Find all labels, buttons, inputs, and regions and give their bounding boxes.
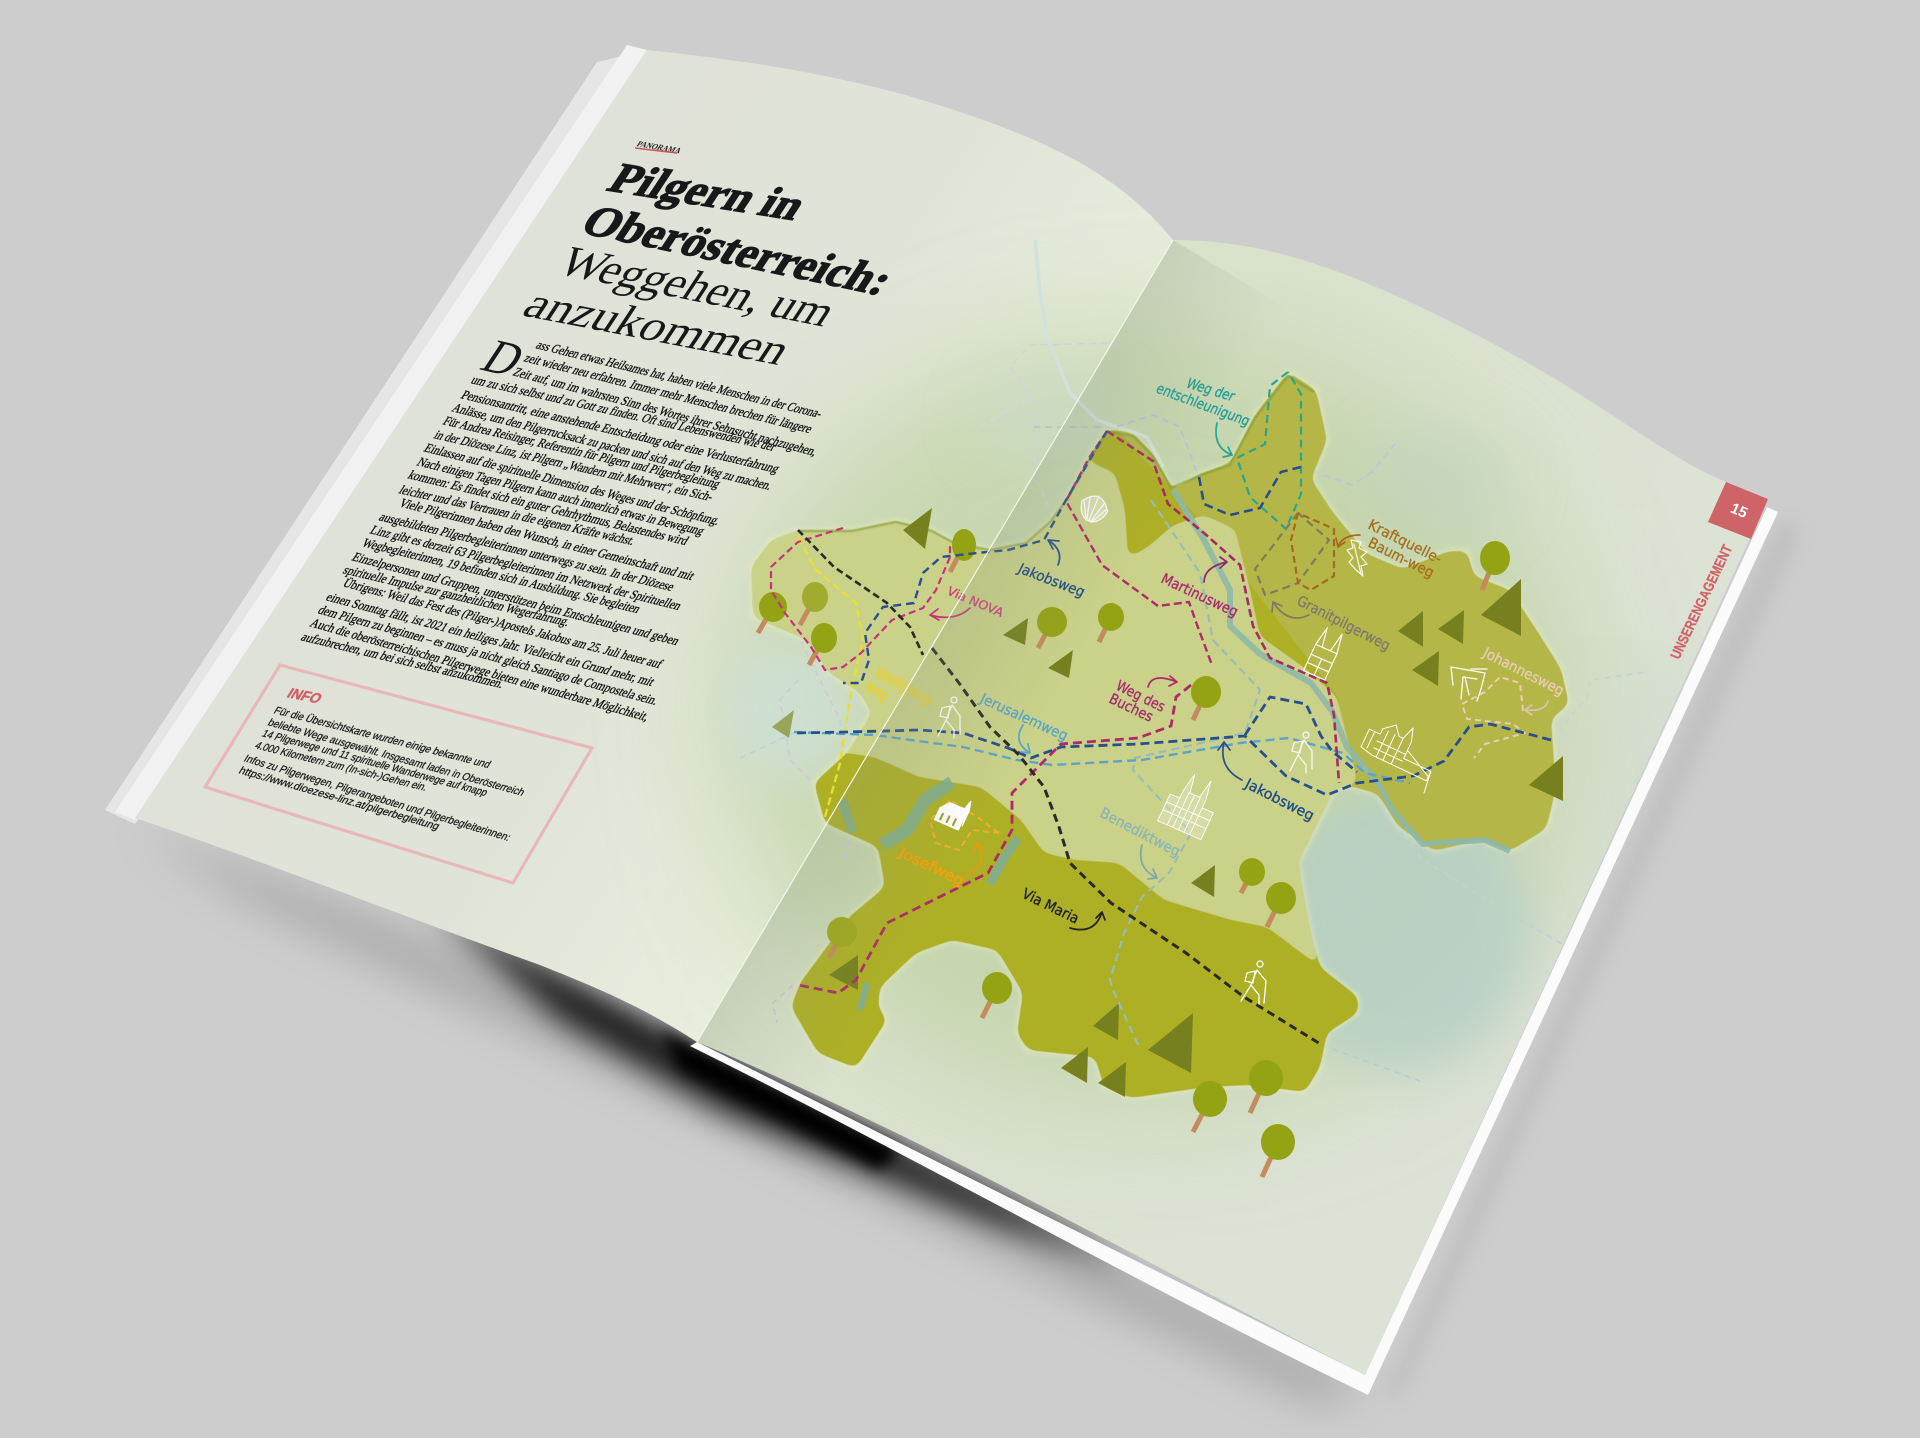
map labels: Kraftquelle- bbox=[1365, 517, 1444, 568]
triangular hills bbox=[772, 508, 1563, 1097]
body article text: Auch die oberösterreichischen Pilgerwege bieten eine wunderbare Möglichkeit, bbox=[307, 616, 652, 724]
north coast dark rim bbox=[798, 376, 1314, 550]
body article text: einen Sonntag fällt, ist 2021 ein heiliges Jahr. Vielleicht ein Grund mehr, mit bbox=[323, 590, 658, 689]
map labels: Johannesweg bbox=[1479, 644, 1567, 700]
land halo bbox=[751, 372, 1569, 1098]
icon: cathedral bbox=[1158, 769, 1225, 840]
map labels: Jakobsweg bbox=[1241, 775, 1317, 825]
body article text: Nach einigen Tagen Pilgern kann auch innerlich etwas in Bewegung bbox=[414, 455, 708, 538]
right page bbox=[697, 240, 1768, 1375]
title: Pilgern in bbox=[599, 154, 817, 229]
map labels: Buches bbox=[1106, 691, 1155, 726]
route: Jakobsweg bbox=[794, 724, 1551, 795]
map labels: Via Maria bbox=[1019, 886, 1081, 928]
route: Weg des Buches bbox=[798, 685, 1191, 993]
route: Jakobsweg north loop bbox=[1199, 467, 1301, 515]
soft map background glows bbox=[720, 330, 1710, 1110]
icon: scallop shell bbox=[1076, 491, 1112, 526]
trees bbox=[758, 529, 1510, 1177]
route: Jerusalemweg bbox=[794, 732, 1410, 783]
body article text: kommen: Es findet sich ein guter Gehrhythmus, Belastendes wird bbox=[405, 468, 692, 548]
info box: https://www.dioezese-linz.at/pilgerbegleitung bbox=[236, 765, 442, 833]
body article text: spirituelle Impulse zur ganzheitlichen Wegerfahrung. bbox=[340, 563, 574, 629]
book shadow on the table bbox=[135, 520, 1800, 1402]
page number tab: 15 bbox=[1728, 500, 1750, 522]
map labels: weg bbox=[863, 677, 891, 705]
icon: twin tower church north bbox=[1303, 626, 1345, 680]
spine fold line bbox=[697, 240, 1173, 1042]
panorama kicker: PANORAMA bbox=[635, 140, 683, 155]
route: Granitpilgerweg bbox=[1255, 513, 1329, 595]
map labels bbox=[863, 376, 1567, 928]
route: Jakobsweg upper loop bbox=[1245, 697, 1357, 772]
rivers and lakes bbox=[842, 490, 1510, 1010]
info box: beliebte Wege ausgewählt. Insgesamt laden in Oberösterreich bbox=[265, 717, 527, 799]
route: Via Nova bbox=[771, 528, 950, 670]
body article text: Anlässe, um den Pilgerrucksack zu packen und sich auf den Weg zu machen. bbox=[449, 401, 775, 493]
body article text: Linz gibt es derzeit 63 Pilgerbegleiterinnen im Netzwerk der Spirituellen bbox=[367, 523, 685, 613]
route: Via Maria bbox=[798, 530, 923, 655]
icon: hiker west bbox=[938, 697, 960, 738]
body article text: Pensionsantritt, eine anstehende Entscheidung oder eine Verlusterfahrung bbox=[458, 388, 783, 476]
body article text: Zeit auf, um im wahrsten Sinn des Wortes ihrer Sehnsucht nachzugehen, bbox=[510, 365, 820, 459]
icon: oak leaf bbox=[1347, 540, 1367, 576]
land fills bbox=[751, 374, 1568, 1098]
map labels: Via NOVA bbox=[945, 584, 1007, 620]
map labels: Jerusalemweg bbox=[976, 691, 1070, 745]
left page bbox=[135, 50, 1173, 1042]
page edges: left page block bbox=[105, 45, 647, 824]
body article text: aufzubrechen, um bei sich selbst anzukommen. bbox=[298, 630, 508, 691]
route: Benediktweg bbox=[1110, 500, 1260, 1047]
map labels: Weg des bbox=[1113, 678, 1167, 716]
route: Via Maria right page bbox=[932, 648, 1322, 1045]
map labels: Josefweg bbox=[895, 845, 966, 890]
body article text: Übrigens: Weil das Fest des (Pilger-)Apostels Jakobus am 25. Juli heuer auf bbox=[340, 576, 666, 671]
body article text: Viele Pilgerinnen haben den Wunsch, in einer Gemeinschaft und mit bbox=[396, 496, 698, 583]
info box: INFO bbox=[284, 686, 325, 707]
title bbox=[514, 154, 904, 374]
info box bbox=[205, 665, 592, 883]
icon: hiker south bbox=[1241, 961, 1266, 1004]
map labels: Weg der bbox=[1183, 376, 1238, 405]
body article text: zeit wieder neu erfahren. Immer mehr Menschen brechen für längere bbox=[521, 351, 816, 436]
map land: Upper Austria bbox=[751, 370, 1570, 1100]
route: crimson main trail bbox=[1066, 431, 1212, 665]
icon: hiker east bbox=[1290, 732, 1312, 773]
white map icons bbox=[934, 491, 1487, 1004]
body article text: Für Andrea Reisinger, Referentin für Pilgern und Pilgerbegleitung bbox=[440, 414, 724, 491]
info box: 14 Pilgerwege und 11 spirituelle Wanderwege auf knapp bbox=[259, 728, 490, 799]
body article text: dem Pilgern zu beginnen – es muss ja nicht gleich Santiago de Compostela sein. bbox=[315, 603, 661, 708]
route: Weg der Entschleunigung bbox=[1237, 372, 1301, 529]
faint routes outside the map and river upstream bbox=[740, 240, 1648, 1083]
page edges: right page block bbox=[690, 507, 1778, 1395]
info box: 4.000 Kilometern zum (In-sich-)Gehen ein. bbox=[252, 740, 430, 794]
map labels: Benediktweg bbox=[1097, 804, 1183, 861]
body article text: leichter und das Vertrauen in die eigenen Kräfte wächst. bbox=[396, 483, 639, 548]
title: Weggehen, um bbox=[549, 237, 847, 336]
body article text: ass Gehen etwas Heilsames hat, haben viele Menschen in der Corona- bbox=[533, 338, 825, 421]
body article text: ausgebildeten Pilgerbegleiterinnen unterwegs zu sein. In der Diözese bbox=[376, 510, 678, 594]
route: Martinusweg bbox=[1107, 431, 1339, 783]
body article text bbox=[298, 330, 825, 724]
route: Wolfgangweg bbox=[798, 537, 863, 817]
map labels: entschleunigung bbox=[1153, 381, 1252, 430]
body article text: Wegbegleiterinnen, 19 befinden sich in Ausbildung. Sie begleiten bbox=[359, 536, 644, 616]
title: Oberösterreich: bbox=[572, 196, 904, 304]
route: Kraftquelle Baum-Weg bbox=[1291, 513, 1334, 590]
title: anzukommen bbox=[514, 279, 802, 374]
map labels: Baum-weg bbox=[1365, 535, 1436, 582]
map labels: Granitpilgerweg bbox=[1294, 592, 1393, 655]
map labels: Jakobsweg bbox=[1014, 561, 1087, 601]
pilgrim routes bbox=[771, 372, 1551, 1047]
page section label: UNSERENGAGEMENT bbox=[1668, 543, 1736, 662]
route: Jakobsweg north bbox=[843, 431, 1107, 683]
map labels: Wolfgang- bbox=[872, 664, 938, 711]
body article text: um zu sich selbst und zu Gott zu finden. Oft sind Lebenswenden wie der bbox=[468, 373, 780, 454]
page number tab bbox=[1708, 482, 1768, 539]
body article text: Einlassen auf die spirituelle Dimension des Weges und der Schöpfung. bbox=[421, 441, 723, 528]
icon: abbey building bbox=[1355, 711, 1447, 793]
route: Josefweg bbox=[930, 800, 999, 850]
spine shading bbox=[698, 240, 1236, 1072]
body article text: in der Diözese Linz, ist Pilgern „Wandern mit Mehrwert“, ein Sich- bbox=[431, 428, 717, 504]
route: Johannesweg bbox=[1462, 677, 1525, 758]
icon: chapel bbox=[934, 791, 973, 831]
info box: Infos zu Pilgerwegen, Pilgerangeboten und Pilgerbegleiterinnen: bbox=[241, 753, 513, 844]
label arrows bbox=[930, 423, 1548, 930]
info box: Für die Übersichtskarte wurden einige bekannte und bbox=[271, 705, 493, 771]
body article text: D bbox=[471, 330, 536, 386]
body article text: Einzelpersonen und Gruppen, unterstützen beim Entschleunigen und geben bbox=[349, 550, 683, 648]
map labels: Martinusweg bbox=[1158, 571, 1240, 621]
icon: horse bbox=[1451, 667, 1487, 701]
